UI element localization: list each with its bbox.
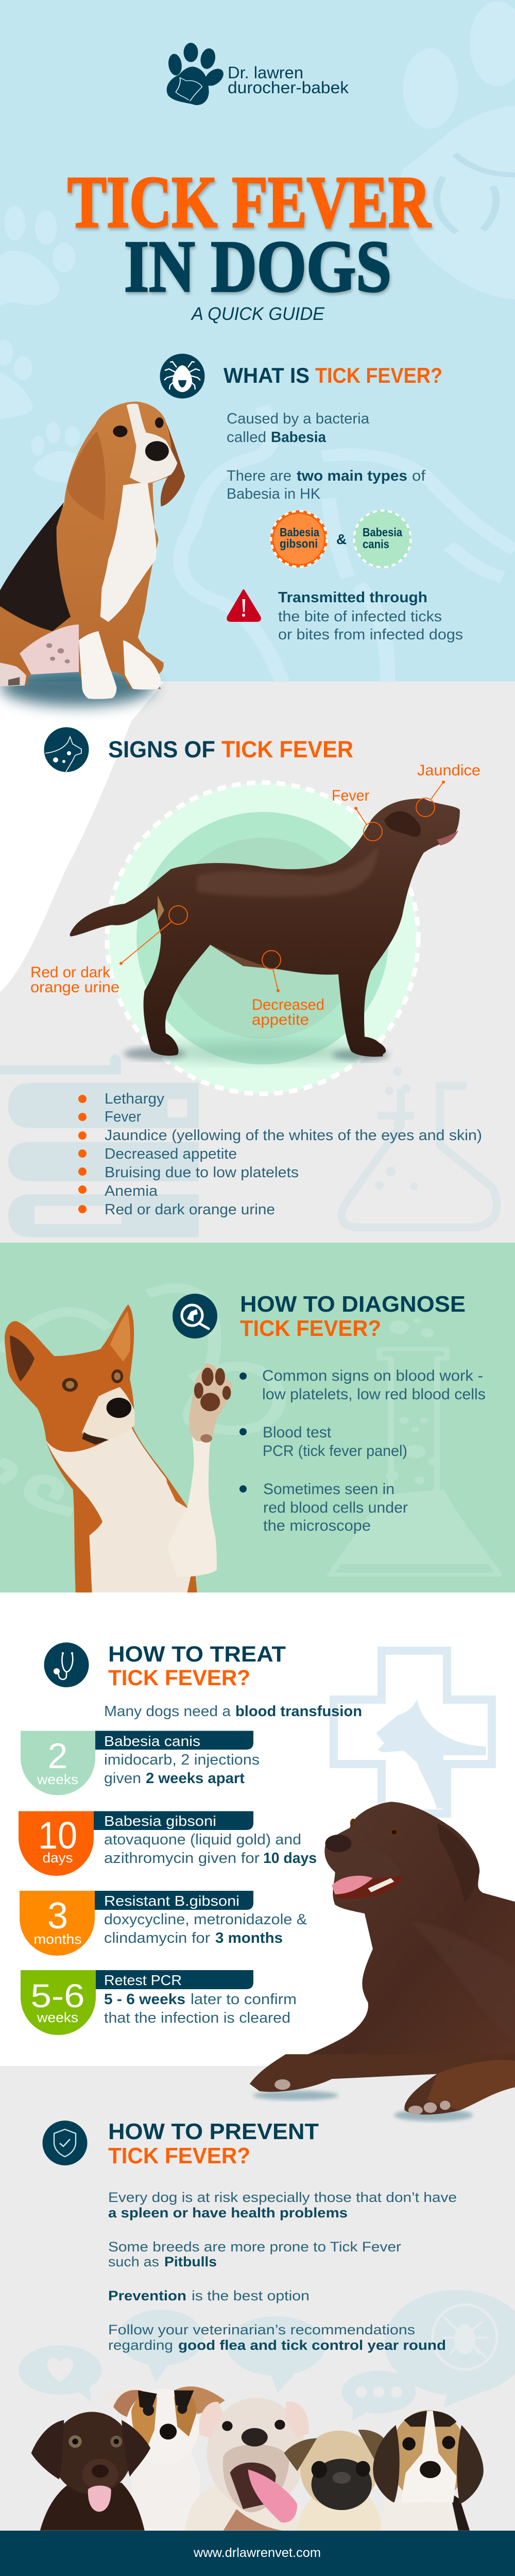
icon: stethoscope xyxy=(44,1642,89,1687)
list: signs: Decreased appetite xyxy=(105,1146,237,1162)
card: babesia gibsoni 10 days: atovaquone (liquid gold) and xyxy=(104,1832,301,1848)
text: prevention xyxy=(108,2288,310,2303)
footer bar: www.drlawrenvet.com xyxy=(193,2546,321,2560)
photo: five puppies xyxy=(31,2386,484,2531)
heading: signs of tick fever xyxy=(108,736,353,762)
text: blood transfusion xyxy=(104,1703,362,1720)
background flask and dog outline xyxy=(0,1288,499,1574)
logo: paw and name xyxy=(167,43,349,105)
logo: paw and name: Dr. lawren xyxy=(228,63,303,82)
text: transmission: the bite of infected ticks xyxy=(278,608,442,625)
card: resistant b.gibsoni 3 months xyxy=(20,1891,307,1956)
text: risk xyxy=(108,2190,457,2221)
heading: what is tick fever: TICK FEVER? xyxy=(315,363,442,387)
heading: how to prevent: TICK FEVER? xyxy=(108,2143,250,2168)
panel: signs of tick fever xyxy=(0,682,515,1243)
list: signs xyxy=(78,1091,482,1218)
puppy: beagle xyxy=(373,2410,484,2531)
card: resistant b.gibsoni 3 months: clindamycin for xyxy=(104,1930,210,1946)
text: cause: Babesia xyxy=(271,429,327,446)
subtitle: A QUICK GUIDE xyxy=(191,304,325,324)
puppy: bulldog xyxy=(185,2398,309,2531)
text: risk: a spleen or have health problems xyxy=(108,2205,348,2221)
title: IN DOGS xyxy=(124,226,391,307)
badge: babesia canis: canis xyxy=(363,537,389,551)
card: resistant b.gibsoni 3 months: months xyxy=(34,1931,81,1947)
text: prevention: is the best option xyxy=(192,2288,310,2303)
title: TICK FEVER xyxy=(67,161,431,243)
text: cause xyxy=(227,411,370,446)
text: cause: Caused by a bacteria xyxy=(227,411,370,427)
shadow under paws xyxy=(253,2091,473,2121)
list: diagnosis: the microscope xyxy=(263,1517,371,1534)
text: transmission: Transmitted through xyxy=(278,589,427,606)
footer bar xyxy=(0,2531,515,2576)
shadow under dog xyxy=(124,1047,389,1061)
list: diagnosis xyxy=(239,1367,486,1534)
text: transmission xyxy=(278,589,463,643)
card: babesia canis 2 weeks: given xyxy=(104,1770,141,1787)
card: retest pcr 5-6 weeks: that the infection is cleared xyxy=(104,2010,290,2026)
photo: sitting beagle xyxy=(0,402,185,699)
callout: fever xyxy=(332,787,382,841)
text: two main types: of xyxy=(412,468,426,484)
list: diagnosis: Sometimes seen in xyxy=(263,1481,394,1498)
text: breeds: Some breeds are more prone to Tick Fever xyxy=(108,2239,401,2255)
card: babesia canis 2 weeks: weeks xyxy=(37,1772,78,1787)
card: babesia canis 2 weeks: Babesia canis xyxy=(104,1733,200,1749)
list: signs: Anemia xyxy=(105,1183,158,1199)
panel: what is tick fever and header xyxy=(0,0,515,706)
puppy: chocolate labrador xyxy=(31,2412,150,2531)
panel: how to diagnose xyxy=(0,1243,515,1592)
card: resistant b.gibsoni 3 months: Resistant B.gibsoni xyxy=(104,1893,239,1909)
card: resistant b.gibsoni 3 months: 3 xyxy=(47,1895,68,1937)
heading: signs of tick fever: TICK FEVER xyxy=(221,736,353,762)
callout: decreased appetite: appetite xyxy=(252,1011,309,1028)
card: babesia gibsoni 10 days: 10 xyxy=(38,1814,77,1857)
text: two main types: Babesia in HK xyxy=(227,486,321,502)
background cross with dog xyxy=(334,1651,492,1814)
icon: dog with ticks xyxy=(44,727,89,772)
card: babesia gibsoni 10 days: days xyxy=(42,1850,73,1866)
text: breeds: such as xyxy=(108,2254,159,2269)
panel: how to treat xyxy=(0,1592,515,2121)
list: diagnosis: Common signs on blood work - xyxy=(262,1367,483,1384)
logo: paw and name: durocher-babek xyxy=(228,78,349,97)
text: risk: Every dog is at risk especially those that don’t have xyxy=(108,2190,457,2205)
background paw prints xyxy=(0,1,515,682)
text: blood transfusion: blood transfusion xyxy=(235,1703,362,1720)
heading: how to diagnose xyxy=(240,1292,466,1341)
callout: red or dark orange urine xyxy=(30,906,187,996)
icon: shield xyxy=(42,2121,88,2165)
list: diagnosis: low platelets, low red blood cells xyxy=(262,1386,486,1403)
puppy: pug xyxy=(284,2430,385,2531)
card: retest pcr 5-6 weeks: weeks xyxy=(37,2010,78,2025)
heading: how to prevent: HOW TO PREVENT xyxy=(108,2119,319,2144)
text: blood transfusion: Many dogs need a xyxy=(104,1703,231,1720)
list: diagnosis: red blood cells under xyxy=(263,1499,408,1516)
text: transmission: or bites from infected dogs xyxy=(278,626,463,643)
photo: basenji raising paw xyxy=(5,1304,233,1592)
title xyxy=(67,161,431,307)
card: retest pcr 5-6 weeks: later to confirm xyxy=(191,1991,297,2008)
heading: how to diagnose: HOW TO DIAGNOSE xyxy=(240,1292,466,1317)
heading: what is tick fever: WHAT IS xyxy=(224,363,310,387)
text: two main types: There are xyxy=(227,468,291,484)
text: breeds xyxy=(108,2239,401,2269)
badge: babesia gibsoni xyxy=(270,510,328,568)
puppy: jack russell xyxy=(104,2386,225,2531)
text: two main types xyxy=(227,468,426,502)
panel: how to prevent xyxy=(0,2066,515,2576)
text: recommendations: regarding xyxy=(108,2337,173,2353)
callout: decreased appetite xyxy=(252,951,324,1028)
badge: babesia gibsoni: Babesia xyxy=(280,526,319,539)
card: retest pcr 5-6 weeks xyxy=(21,1970,297,2035)
card: babesia gibsoni 10 days: azithromycin given for xyxy=(104,1850,260,1867)
photo: lying chocolate labrador xyxy=(250,1802,515,2115)
card: babesia canis 2 weeks xyxy=(21,1731,260,1795)
callout: red or dark orange urine: orange urine xyxy=(30,979,119,996)
text: recommendations: Follow your veterinarian’s recommendations xyxy=(108,2322,415,2337)
list: signs: Bruising due to low platelets xyxy=(105,1164,299,1181)
shadow under beagle xyxy=(0,667,154,706)
list: signs: Red or dark orange urine xyxy=(105,1201,275,1218)
list: diagnosis: Blood test xyxy=(263,1424,332,1441)
list: diagnosis: PCR (tick fever panel) xyxy=(263,1443,407,1460)
list: signs: Jaundice (yellowing of the whites of the eyes and skin) xyxy=(105,1127,482,1144)
text: cause: called xyxy=(227,429,266,446)
heading: what is tick fever xyxy=(224,363,442,387)
chart: concentric target circles xyxy=(107,783,418,1094)
text: two main types: two main types xyxy=(297,468,407,484)
text: recommendations: good flea and tick control year round xyxy=(178,2337,446,2353)
card: babesia canis 2 weeks: 2 xyxy=(48,1736,67,1776)
speech bubbles background xyxy=(19,2290,515,2421)
badge: babesia canis xyxy=(353,510,411,568)
card: resistant b.gibsoni 3 months: 3 months xyxy=(215,1930,283,1946)
heading: how to diagnose: TICK FEVER? xyxy=(240,1316,381,1341)
callout: fever: Fever xyxy=(332,787,369,804)
list: signs: Lethargy xyxy=(105,1091,165,1107)
text: recommendations xyxy=(108,2322,446,2353)
badge: babesia canis: Babesia xyxy=(363,526,402,539)
callout: jaundice: Jaundice xyxy=(417,762,480,779)
card: babesia gibsoni 10 days: 10 days xyxy=(263,1850,317,1867)
card: resistant b.gibsoni 3 months: doxycycline, metronidazole & xyxy=(104,1911,307,1928)
callout: decreased appetite: Decreased xyxy=(252,996,324,1013)
card: retest pcr 5-6 weeks: 5 - 6 weeks xyxy=(104,1991,185,2008)
heading: how to prevent xyxy=(108,2119,319,2168)
heading: signs of tick fever: SIGNS OF xyxy=(108,736,215,762)
list: signs: Fever xyxy=(105,1109,141,1125)
card: babesia canis 2 weeks: imidocarb, 2 injections xyxy=(104,1752,260,1768)
photo: standing chocolate labrador xyxy=(70,799,460,1057)
heading: how to treat: HOW TO TREAT xyxy=(108,1642,286,1667)
card: babesia canis 2 weeks: 2 weeks apart xyxy=(146,1770,245,1787)
card: babesia gibsoni 10 days: Babesia gibsoni xyxy=(104,1813,216,1829)
card: babesia gibsoni 10 days xyxy=(19,1811,317,1876)
callout: red or dark orange urine: Red or dark xyxy=(30,964,111,981)
card: retest pcr 5-6 weeks: Retest PCR xyxy=(104,1972,182,1988)
icon: magnifier with dog xyxy=(173,1294,217,1338)
ampersand: & xyxy=(336,531,347,547)
icon: warning triangle xyxy=(228,590,260,621)
badge: babesia gibsoni: gibsoni xyxy=(280,537,318,550)
text: prevention: Prevention xyxy=(108,2288,186,2303)
heading: how to treat xyxy=(108,1642,286,1690)
icon: tick xyxy=(160,353,205,399)
text: breeds: Pitbulls xyxy=(164,2254,217,2269)
heading: how to treat: TICK FEVER? xyxy=(108,1666,250,1690)
callout: jaundice xyxy=(416,762,480,817)
card: retest pcr 5-6 weeks: 5-6 xyxy=(31,1977,84,2014)
